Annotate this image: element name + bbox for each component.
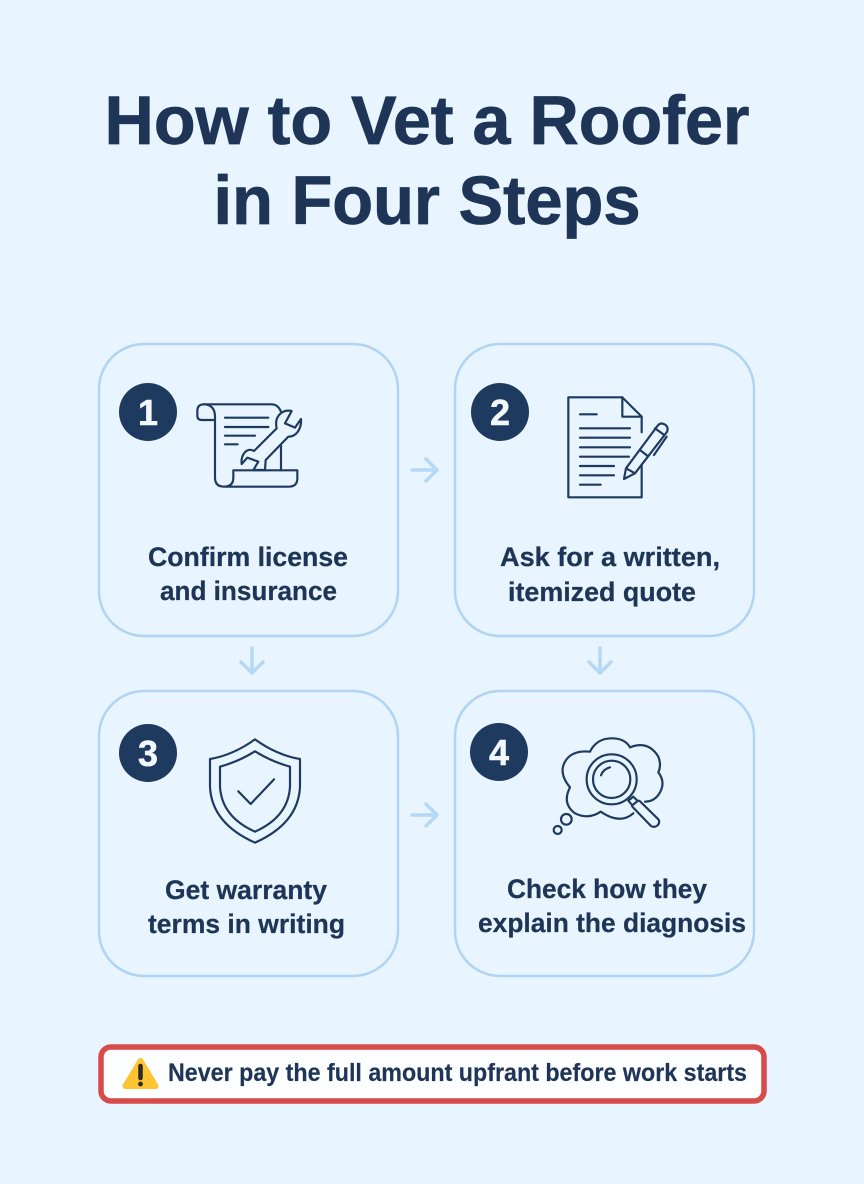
step 3 label: terms in writing xyxy=(148,909,345,939)
step 4 number badge: 4 xyxy=(489,732,509,773)
step 2 number badge: 2 xyxy=(490,392,510,433)
step 4 label: explain the diagnosis xyxy=(478,908,746,938)
arrow: step 1 to step 2 xyxy=(412,459,437,481)
step 1 number badge: 1 xyxy=(138,392,158,433)
warning text: Never pay the full amount upfrant before work starts xyxy=(168,1059,747,1087)
icon: scroll with wrench xyxy=(197,404,301,487)
title: How to Vet a Roofer xyxy=(104,82,750,159)
step 3 label xyxy=(148,875,345,939)
step 3 number badge xyxy=(119,724,177,782)
step 4 label: Check how they xyxy=(507,874,707,904)
step 2 label: itemized quote xyxy=(508,577,696,607)
step 1 label: Confirm license xyxy=(148,542,348,572)
panel: step 3 xyxy=(99,691,398,976)
panel: step 4 xyxy=(455,691,754,976)
step 2 label xyxy=(500,542,720,607)
step 2 label: Ask for a written, xyxy=(500,542,720,572)
arrow: step 3 to step 4 xyxy=(412,804,437,826)
step 1 label xyxy=(148,542,348,606)
step 2 number badge xyxy=(471,383,529,441)
arrow: step 2 to step 4 xyxy=(589,648,611,673)
callout: warning xyxy=(101,1047,764,1101)
step 3 label: Get warranty xyxy=(165,875,327,905)
step 4 number badge xyxy=(470,723,528,781)
icon: warning triangle xyxy=(126,1061,156,1086)
title: in Four Steps xyxy=(214,162,640,239)
icon: shield with check xyxy=(210,739,300,843)
icon: document and pen xyxy=(568,397,668,497)
step 3 number badge: 3 xyxy=(138,733,158,774)
arrow: step 1 to step 3 xyxy=(241,648,263,673)
title xyxy=(104,82,750,239)
panel: step 2 xyxy=(455,344,754,636)
step 1 label: and insurance xyxy=(160,576,337,606)
icon: thought cloud with magnifier xyxy=(554,738,662,834)
step 4 label xyxy=(478,874,746,938)
panel: step 1 xyxy=(99,344,398,636)
step 1 number badge xyxy=(119,383,177,441)
